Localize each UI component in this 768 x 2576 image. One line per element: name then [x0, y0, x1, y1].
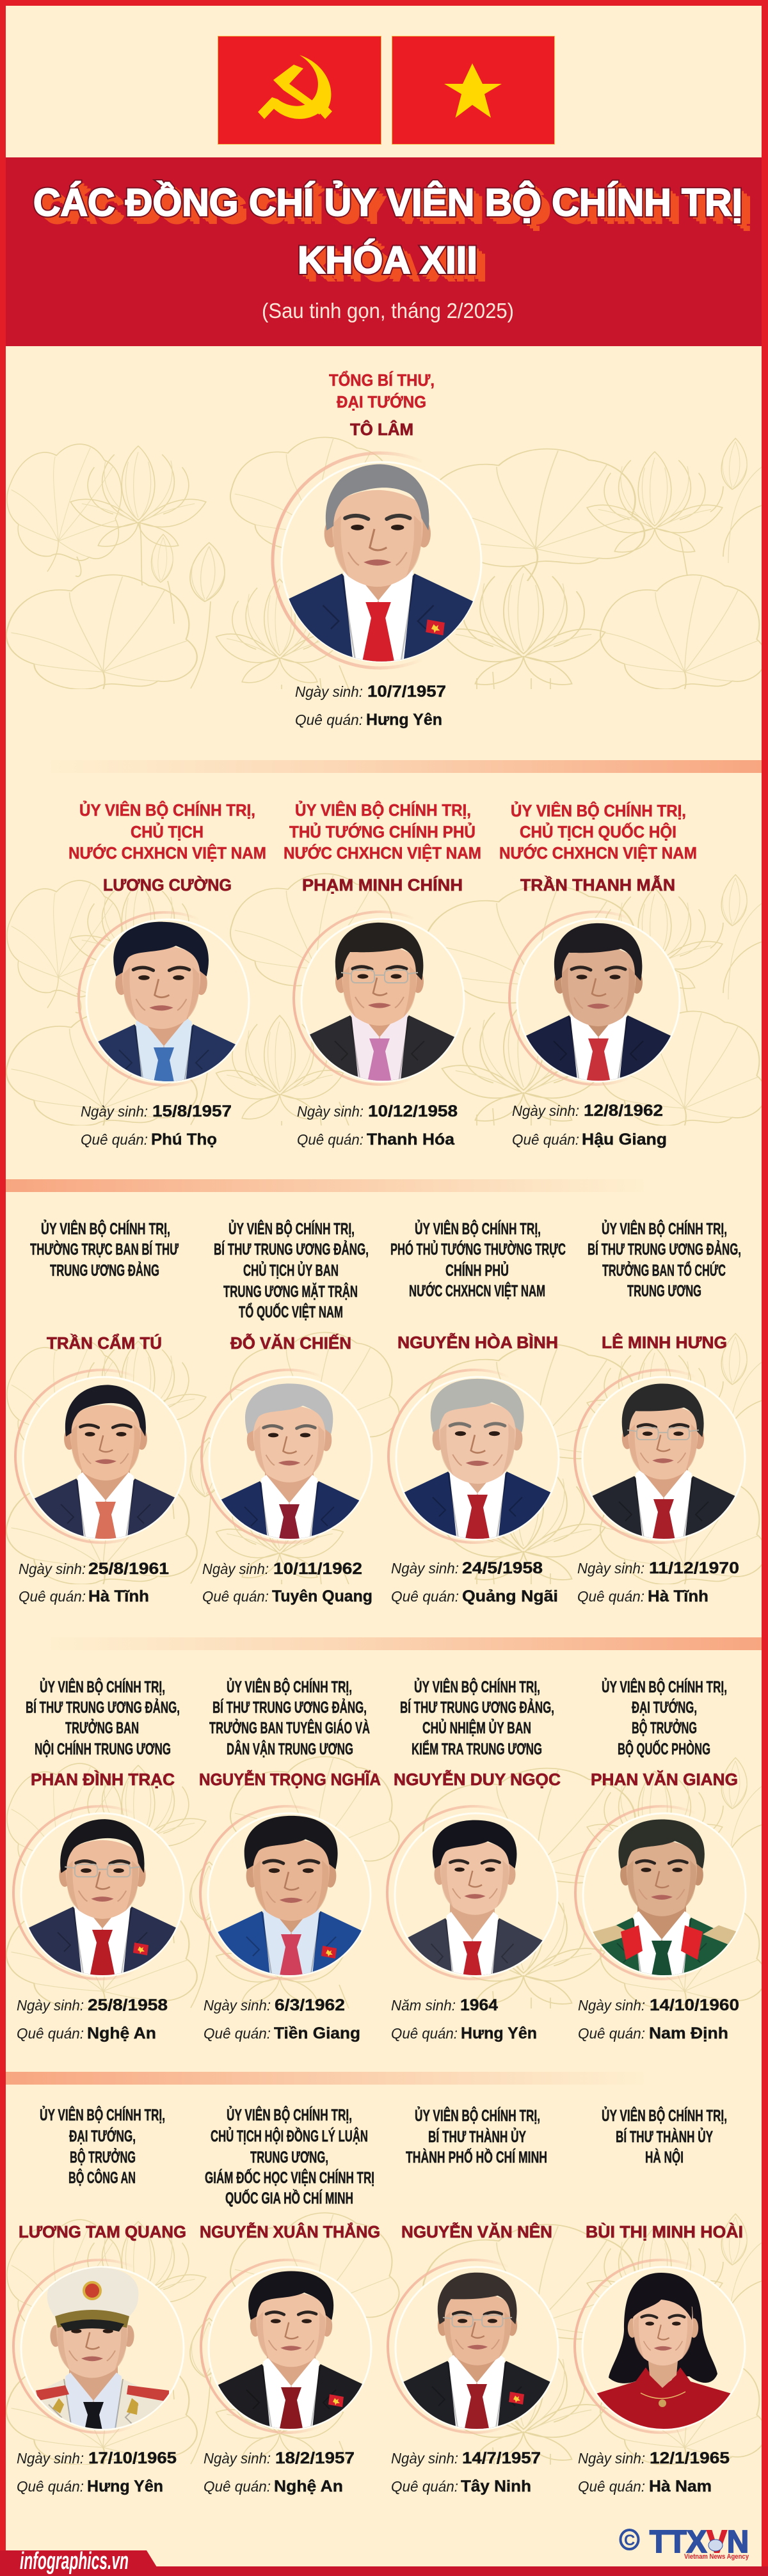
role: [284, 800, 481, 863]
portrait: [374, 2260, 579, 2444]
role: BÍ THƯ TRUNG ƯƠNG ĐẢNG,: [214, 1239, 369, 1259]
birth date and hometown: [19, 1560, 169, 1605]
birth date and hometown: Tây Ninh: [461, 2477, 531, 2495]
role: TỔ QUỐC VIỆT NAM: [239, 1302, 343, 1321]
role: GIÁM ĐỐC HỌC VIỆN CHÍNH TRỊ: [205, 2168, 374, 2187]
role: ỦY VIÊN BỘ CHÍNH TRỊ,: [227, 2105, 352, 2124]
role: ỦY VIÊN BỘ CHÍNH TRỊ,: [79, 800, 255, 820]
birth date and hometown: [295, 683, 446, 729]
person: Trần Cẩm Tú: [3, 1219, 208, 1605]
name: BÙI THỊ MINH HOÀI: [586, 2222, 743, 2241]
role: [329, 370, 435, 411]
role: ỦY VIÊN BỘ CHÍNH TRỊ,: [415, 1219, 541, 1238]
footer bar with site tab: infographics.vn: [20, 2548, 129, 2575]
birth date and hometown: Ngày sinh:: [391, 1560, 459, 1577]
role: CHỦ TỊCH: [131, 822, 204, 841]
section divider bands: [6, 760, 762, 2085]
name: PHẠM MINH CHÍNH: [302, 875, 463, 894]
footer bar with site tab: [0, 2548, 768, 2576]
role: [390, 1219, 566, 1300]
portrait: [14, 1369, 187, 1544]
birth date and hometown: [512, 1102, 667, 1149]
name: PHAN VĂN GIANG: [591, 1770, 738, 1789]
role: TRƯỞNG BAN: [65, 1718, 139, 1737]
title: KHÓA XIII: [304, 244, 484, 287]
birth date and hometown: Quê quán:: [391, 2025, 458, 2042]
person: Trần Thanh Mẫn: [496, 800, 701, 1149]
birth date and hometown: [202, 1560, 372, 1605]
role: [40, 2105, 165, 2187]
person: Nguyễn Xuân Thắng: [189, 2105, 394, 2495]
birth date and hometown: Ngày sinh:: [297, 1103, 364, 1120]
role: CHỦ TỊCH QUỐC HỘI: [520, 822, 676, 841]
role: [602, 2106, 727, 2167]
birth date and hometown: Ngày sinh:: [578, 1997, 645, 2014]
title: CÁC ĐỒNG CHÍ ỦY VIÊN BỘ CHÍNH TRỊ: [33, 181, 742, 224]
role: ỦY VIÊN BỘ CHÍNH TRỊ,: [41, 1219, 170, 1238]
birth date and hometown: Quê quán:: [391, 2478, 458, 2495]
birth date and hometown: Quê quán:: [17, 2478, 84, 2495]
birth date and hometown: [204, 1996, 360, 2042]
person: Nguyễn Trọng Nghĩa: [189, 1677, 394, 2042]
person: Nguyễn Văn Nên: [374, 2106, 579, 2495]
birth date and hometown: Ngày sinh:: [512, 1102, 579, 1119]
role: ĐẠI TƯỚNG: [337, 392, 426, 411]
birth date and hometown: Quê quán:: [202, 1588, 269, 1605]
name: PHAN ĐÌNH TRẠC: [31, 1770, 175, 1789]
birth date and hometown: Quê quán:: [19, 1588, 86, 1605]
role: ỦY VIÊN BỘ CHÍNH TRỊ,: [40, 2105, 165, 2124]
name: NGUYỄN XUÂN THẮNG: [200, 2222, 380, 2241]
name: NGUYỄN DUY NGỌC: [394, 1770, 561, 1789]
name: LƯƠNG CƯỜNG: [103, 875, 232, 894]
title: [33, 181, 752, 289]
title: KHÓA XIII: [298, 239, 477, 282]
role: BỘ QUỐC PHÒNG: [618, 1739, 710, 1758]
role: ỦY VIÊN BỘ CHÍNH TRỊ,: [511, 800, 686, 820]
birth date and hometown: Nghệ An: [274, 2477, 343, 2495]
title: CÁC ĐỒNG CHÍ ỦY VIÊN BỘ CHÍNH TRỊ: [33, 181, 742, 224]
birth date and hometown: Quê quán:: [17, 2025, 84, 2042]
birth date and hometown: Hưng Yên: [461, 2024, 537, 2042]
person: Lương Cường: [61, 800, 266, 1149]
title: KHÓA XIII: [307, 246, 487, 289]
role: ĐẠI TƯỚNG,: [632, 1697, 697, 1717]
person: Nguyễn Hòa Bình: [375, 1219, 580, 1605]
role: [209, 1677, 370, 1758]
birth date and hometown: Hậu Giang: [582, 1131, 667, 1149]
person: Bùi Thị Minh Hoài: [575, 2106, 748, 2495]
title: CÁC ĐỒNG CHÍ ỦY VIÊN BỘ CHÍNH TRỊ: [36, 184, 746, 227]
birth date and hometown: 10/11/1962: [273, 1560, 362, 1578]
birth date and hometown: Ngày sinh:: [19, 1561, 86, 1577]
person: Lương Tam Quang: [0, 2105, 196, 2495]
birth date and hometown: Quê quán:: [512, 1131, 579, 1148]
role: [26, 1677, 180, 1758]
role: [205, 2105, 374, 2207]
birth date and hometown: Ngày sinh:: [577, 1560, 644, 1577]
portrait: [573, 1369, 746, 1544]
role: HÀ NỘI: [645, 2147, 684, 2167]
role: [588, 1219, 741, 1300]
birth date and hometown: Hà Nam: [649, 2477, 712, 2495]
name: NGUYỄN VĂN NÊN: [401, 2222, 552, 2241]
birth date and hometown: Ngày sinh:: [17, 1997, 84, 2014]
person: Lê Minh Hưng: [573, 1220, 746, 1605]
logo: TTXVN copyright: TTXVN: [650, 2525, 749, 2559]
person: Nguyễn Duy Ngọc: [378, 1677, 566, 2042]
role: [400, 1677, 554, 1758]
role: TRUNG ƯƠNG,: [250, 2149, 328, 2167]
role: ỦY VIÊN BỘ CHÍNH TRỊ,: [228, 1219, 355, 1238]
birth date and hometown: Hà Tĩnh: [648, 1587, 708, 1605]
name: ĐỖ VĂN CHIẾN: [230, 1333, 351, 1353]
name: LÊ MINH HƯNG: [602, 1333, 727, 1352]
title: KHÓA XIII: [301, 241, 481, 284]
birth date and hometown: 25/8/1961: [88, 1560, 169, 1578]
birth date and hometown: Ngày sinh:: [295, 683, 363, 700]
role: BÍ THƯ THÀNH ỦY: [616, 2127, 713, 2146]
portrait: [292, 910, 465, 1086]
role: ĐẠI TƯỚNG,: [69, 2126, 136, 2145]
portrait: [271, 452, 483, 669]
birth date and hometown: 10/12/1958: [368, 1102, 458, 1120]
person: Phan Đình Trạc: [0, 1677, 205, 2042]
icon: party flag with hammer and sickle: [218, 36, 381, 145]
role: TỔNG BÍ THƯ,: [329, 370, 435, 390]
role: ỦY VIÊN BỘ CHÍNH TRỊ,: [295, 800, 471, 820]
birth date and hometown: [578, 2449, 730, 2495]
role: BÍ THƯ TRUNG ƯƠNG ĐẢNG,: [212, 1697, 367, 1717]
role: TRUNG ƯƠNG: [627, 1282, 701, 1300]
role: BÍ THƯ TRUNG ƯƠNG ĐẢNG,: [400, 1697, 554, 1717]
role: CHỦ TỊCH HỘI ĐỒNG LÝ LUẬN: [211, 2126, 368, 2145]
birth date and hometown: Quê quán:: [391, 1588, 459, 1605]
portrait: [387, 1369, 559, 1544]
name: NGUYỄN HÒA BÌNH: [397, 1333, 558, 1352]
role: [68, 800, 266, 863]
birth date and hometown: Năm sinh:: [391, 1997, 456, 2014]
role: BÍ THƯ THÀNH ỦY: [428, 2127, 526, 2146]
role: THÀNH PHỐ HỒ CHÍ MINH: [406, 2147, 547, 2167]
birth date and hometown: Quê quán:: [577, 1588, 644, 1605]
birth date and hometown: Quảng Ngãi: [462, 1587, 558, 1605]
birth date and hometown: Quê quán:: [297, 1131, 364, 1148]
portrait: [12, 1805, 184, 1980]
role: PHÓ THỦ TƯỚNG THƯỜNG TRỰC: [390, 1239, 566, 1259]
name: NGUYỄN TRỌNG NGHĨA: [199, 1770, 381, 1789]
birth date and hometown: [297, 1102, 458, 1149]
portrait: [189, 2260, 394, 2447]
role: CHỦ NHIỆM ỦY BAN: [422, 1718, 531, 1737]
role: THƯỜNG TRỰC BAN BÍ THƯ: [30, 1239, 179, 1259]
title: CÁC ĐỒNG CHÍ ỦY VIÊN BỘ CHÍNH TRỊ: [43, 189, 752, 232]
portrait: [575, 2260, 748, 2438]
birth date and hometown: Tuyên Quang: [272, 1587, 372, 1605]
role: BỘ TRƯỞNG: [70, 2147, 136, 2167]
birth date and hometown: 24/5/1958: [462, 1559, 543, 1577]
portrait: [386, 1805, 558, 1980]
role: TRƯỞNG BAN TUYÊN GIÁO VÀ: [209, 1718, 370, 1737]
name: TRẦN CẨM TÚ: [47, 1333, 162, 1353]
birth date and hometown: Quê quán:: [578, 2025, 645, 2042]
role: NƯỚC CHXHCN VIỆT NAM: [68, 843, 266, 863]
portrait: [200, 1369, 372, 1544]
portrait: [77, 911, 250, 1086]
birth date and hometown: 11/12/1970: [649, 1559, 739, 1577]
portrait: [508, 910, 681, 1086]
birth date and hometown: Ngày sinh:: [391, 2450, 458, 2467]
birth date and hometown: Hà Tĩnh: [88, 1587, 149, 1605]
person: Phạm Minh Chính: [277, 800, 482, 1149]
role: NƯỚC CHXHCN VIỆT NAM: [499, 843, 697, 863]
portrait: [559, 1806, 764, 2001]
birth date and hometown: Nghệ An: [87, 2024, 156, 2042]
birth date and hometown: 1964: [460, 1996, 498, 2014]
birth date and hometown: 12/8/1962: [584, 1102, 663, 1120]
birth date and hometown: 14/10/1960: [650, 1996, 739, 2014]
birth date and hometown: Quê quán:: [204, 2478, 271, 2495]
role: CHỦ TỊCH ỦY BAN: [243, 1260, 339, 1280]
birth date and hometown: [204, 2449, 355, 2495]
birth date and hometown: Hưng Yên: [87, 2477, 163, 2495]
birth date and hometown: Quê quán:: [81, 1131, 148, 1148]
birth date and hometown: 25/8/1958: [88, 1996, 168, 2014]
birth date and hometown: 17/10/1965: [88, 2449, 177, 2467]
birth date and hometown: [391, 1559, 558, 1605]
portrait: [199, 1805, 371, 1980]
birth date and hometown: 12/1/1965: [650, 2449, 730, 2467]
role: NỘI CHÍNH TRUNG ƯƠNG: [35, 1739, 171, 1758]
birth date and hometown: Tiền Giang: [274, 2024, 360, 2042]
role: [406, 2106, 547, 2167]
title: CÁC ĐỒNG CHÍ ỦY VIÊN BỘ CHÍNH TRỊ: [40, 186, 749, 229]
lotus background patterns: [0, 431, 766, 2479]
birth date and hometown: 14/7/1957: [462, 2449, 541, 2467]
role: NƯỚC CHXHCN VIỆT NAM: [284, 843, 481, 863]
role: [30, 1219, 179, 1280]
role: BỘ CÔNG AN: [68, 2168, 136, 2187]
title: KHÓA XIII: [298, 239, 477, 282]
role: ỦY VIÊN BỘ CHÍNH TRỊ,: [227, 1677, 352, 1696]
birth date and hometown: [391, 1996, 537, 2042]
name: TÔ LÂM: [350, 420, 413, 439]
role: [214, 1219, 369, 1321]
birth date and hometown: Ngày sinh:: [204, 1997, 271, 2014]
birth date and hometown: Ngày sinh:: [204, 2450, 271, 2467]
birth date and hometown: [17, 1996, 168, 2042]
birth date and hometown: Ngày sinh:: [578, 2450, 645, 2467]
role: TRUNG ƯƠNG MẶT TRẬN: [223, 1282, 358, 1301]
birth date and hometown: Ngày sinh:: [17, 2450, 84, 2467]
logo: TTXVN copyright: Vietnam News Agency: [684, 2553, 749, 2561]
logo: TTXVN copyright: C: [624, 2532, 635, 2549]
role: CHÍNH PHỦ: [445, 1260, 509, 1280]
role: THỦ TƯỚNG CHÍNH PHỦ: [289, 822, 476, 841]
role: NƯỚC CHXHCN VIỆT NAM: [409, 1281, 545, 1300]
person: Tô Lâm: [271, 370, 483, 728]
birth date and hometown: 18/2/1957: [275, 2449, 355, 2467]
role: BÍ THƯ TRUNG ƯƠNG ĐẢNG,: [26, 1697, 180, 1717]
subtitle: (Sau tinh gọn, tháng 2/2025): [262, 299, 514, 322]
role: ỦY VIÊN BỘ CHÍNH TRỊ,: [415, 2106, 540, 2125]
birth date and hometown: Hưng Yên: [366, 711, 442, 729]
role: ỦY VIÊN BỘ CHÍNH TRỊ,: [40, 1677, 165, 1696]
birth date and hometown: Phú Thọ: [151, 1131, 217, 1149]
birth date and hometown: [17, 2449, 177, 2495]
person: Đỗ Văn Chiến: [187, 1219, 392, 1605]
role: KIỂM TRA TRUNG ƯƠNG: [412, 1740, 542, 1758]
birth date and hometown: Thanh Hóa: [367, 1131, 455, 1149]
birth date and hometown: Quê quán:: [295, 712, 363, 728]
role: DÂN VẬN TRUNG ƯƠNG: [227, 1739, 353, 1758]
birth date and hometown: Quê quán:: [204, 2025, 271, 2042]
role: [499, 800, 697, 863]
birth date and hometown: Nam Định: [649, 2024, 728, 2042]
portrait: [0, 2260, 196, 2462]
birth date and hometown: [81, 1102, 232, 1149]
role: ỦY VIÊN BỘ CHÍNH TRỊ,: [414, 1677, 540, 1696]
role: [602, 1677, 727, 1758]
name: TRẦN THANH MẪN: [520, 875, 675, 894]
birth date and hometown: 10/7/1957: [367, 683, 446, 701]
person: Phan Văn Giang: [574, 1678, 746, 2042]
name: LƯƠNG TAM QUANG: [19, 2222, 186, 2241]
title banner: [6, 157, 762, 346]
birth date and hometown: 6/3/1962: [275, 1996, 345, 2014]
birth date and hometown: Quê quán:: [578, 2478, 645, 2495]
birth date and hometown: Ngày sinh:: [202, 1561, 269, 1577]
birth date and hometown: [577, 1559, 739, 1605]
role: TRUNG ƯƠNG ĐẢNG: [50, 1260, 159, 1280]
icon: national flag with star: [392, 36, 554, 145]
birth date and hometown: Ngày sinh:: [81, 1103, 148, 1120]
birth date and hometown: [578, 1996, 739, 2042]
role: QUỐC GIA HỒ CHÍ MINH: [225, 2188, 353, 2207]
birth date and hometown: [391, 2449, 541, 2495]
birth date and hometown: 15/8/1957: [152, 1102, 232, 1120]
role: BỘ TRƯỞNG: [632, 1718, 697, 1737]
